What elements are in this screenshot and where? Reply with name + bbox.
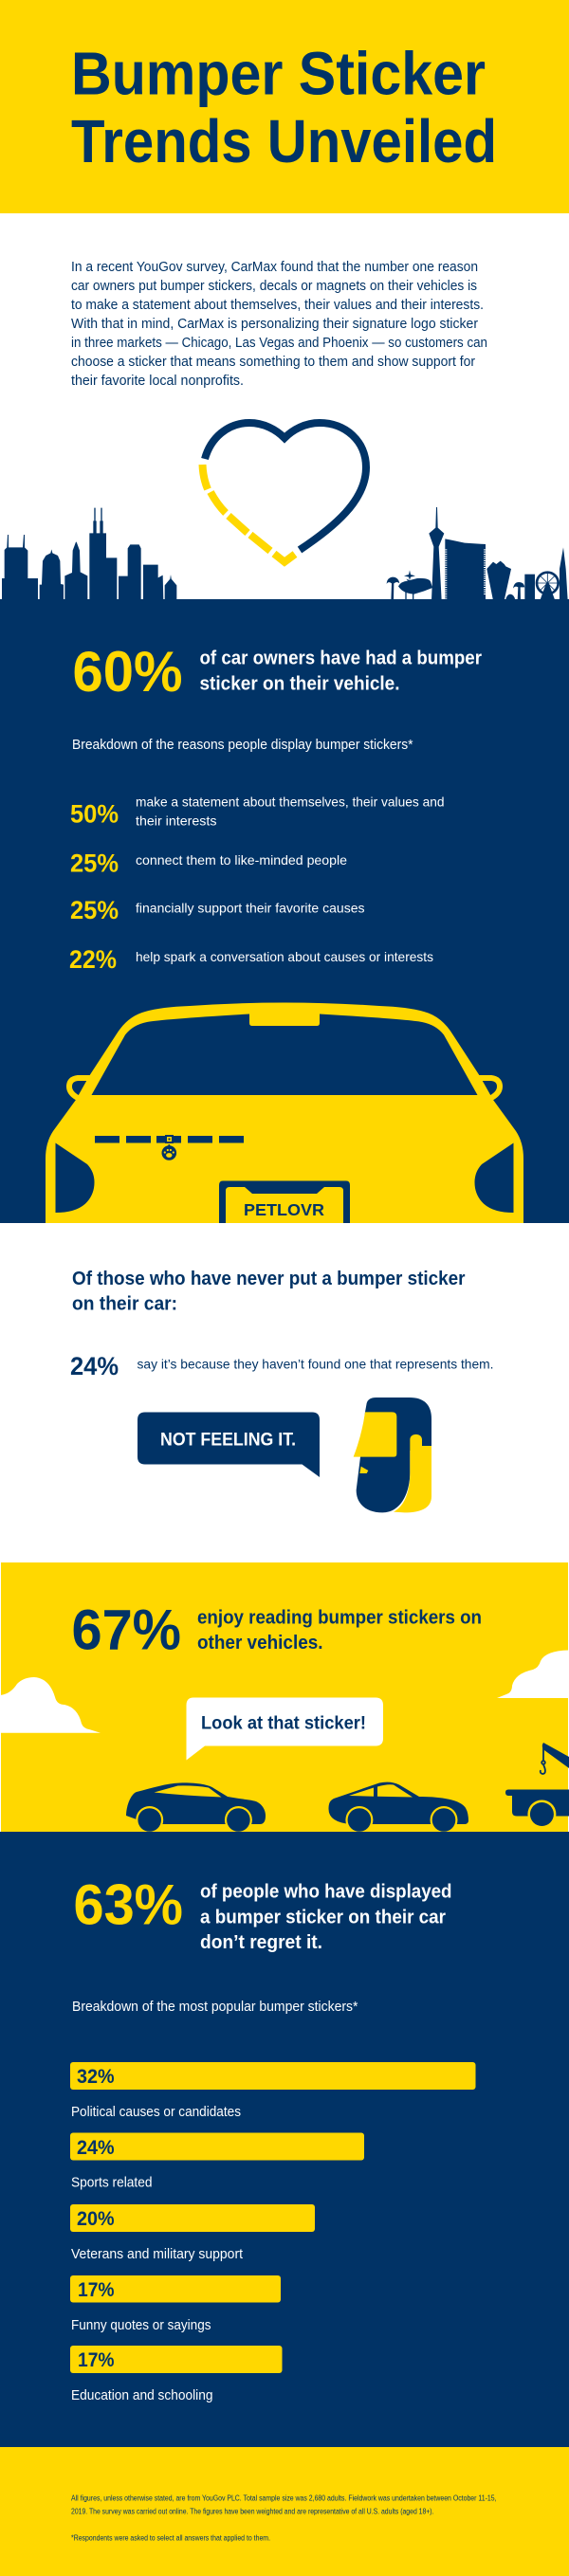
footnote text: 2019. The survey was carried out online. The figures have been weighted and are representative of all U.S. adults (aged 18+). bbox=[71, 2507, 434, 2516]
stat description: sticker on their vehicle. bbox=[199, 673, 400, 694]
skyline: Las Vegas bbox=[387, 507, 568, 600]
reason list: financially support their favorite causes bbox=[136, 901, 364, 916]
bar chart: 17% bbox=[78, 2279, 115, 2301]
bar chart: 17% bbox=[78, 2349, 115, 2371]
stat: 63%: 63% bbox=[74, 1873, 183, 1936]
stat description: of people who have displayed bbox=[200, 1881, 451, 1902]
icon: curved hotel bbox=[445, 539, 486, 600]
bar chart: 24% bbox=[77, 2137, 115, 2159]
icon: tow truck bbox=[505, 1743, 569, 1828]
stat description: don’t regret it. bbox=[200, 1931, 322, 1953]
stat description: of car owners have had a bumper bbox=[199, 647, 482, 669]
icon: car middle bbox=[328, 1782, 468, 1834]
icon: heart bbox=[203, 423, 366, 562]
panel: 67 percent section bbox=[0, 1562, 569, 1834]
footnote text: *Respondents were asked to select all answers that applied to them. bbox=[71, 2533, 270, 2543]
stat description: other vehicles. bbox=[197, 1632, 322, 1653]
stat description bbox=[199, 647, 482, 694]
bumper sticker dashes bbox=[95, 1136, 244, 1143]
speech bubble: Look at that sticker! bbox=[201, 1712, 366, 1733]
reason list bbox=[69, 795, 444, 974]
intro text block: In a recent YouGov survey, CarMax found that the number one reason bbox=[71, 260, 478, 275]
title: Bumper Sticker bbox=[71, 40, 486, 108]
heading: Of those who have never put a bumper sticker bbox=[72, 1269, 466, 1289]
panel: 60 percent section bbox=[0, 599, 569, 1223]
icon: paw tag bbox=[161, 1135, 176, 1160]
panel: 63 percent section bbox=[0, 1832, 569, 2447]
intro text block: to make a statement about themselves, their values and their interests. bbox=[71, 298, 484, 313]
icon: ferris wheel bbox=[537, 573, 559, 600]
intro text block: in three markets — Chicago, Las Vegas and Phoenix — so customers can bbox=[71, 336, 487, 351]
stat: 60%: 60% bbox=[72, 640, 182, 703]
bar chart: 32% bbox=[77, 2066, 115, 2088]
reason list: 25% bbox=[70, 850, 119, 878]
license plate bbox=[219, 1181, 350, 1223]
reason list: 25% bbox=[70, 896, 119, 924]
title bbox=[71, 40, 497, 175]
breakdown heading: Breakdown of the most popular bumper stickers* bbox=[72, 2000, 358, 2015]
bar chart: Sports related bbox=[71, 2175, 152, 2190]
panel: title banner bbox=[0, 0, 569, 213]
stat description bbox=[200, 1881, 451, 1953]
bar chart: Political causes or candidates bbox=[71, 2105, 241, 2120]
speech bubble bbox=[138, 1413, 320, 1477]
icon: Las Vegas sign bbox=[398, 570, 432, 600]
footnote text bbox=[71, 2494, 497, 2543]
heading: on their car: bbox=[72, 1293, 177, 1314]
reason list: their interests bbox=[136, 813, 216, 829]
intro text block bbox=[71, 260, 487, 389]
bar chart: 20% bbox=[77, 2208, 115, 2230]
bar chart bbox=[70, 2062, 476, 2403]
reason list: help spark a conversation about causes or interests bbox=[136, 949, 433, 964]
headlights bbox=[55, 1143, 514, 1213]
intro text block: choose a sticker that means something to them and show support for bbox=[71, 355, 475, 370]
intro text block: their favorite local nonprofits. bbox=[71, 374, 244, 389]
bar chart: Education and schooling bbox=[71, 2388, 212, 2403]
bar chart: Funny quotes or sayings bbox=[71, 2318, 211, 2333]
mirrors bbox=[69, 1078, 500, 1098]
stat description: a bumper sticker on their car bbox=[200, 1906, 446, 1928]
speech bubble: NOT FEELING IT. bbox=[160, 1430, 296, 1451]
reason list: 22% bbox=[69, 945, 117, 974]
icon: yellow car front bbox=[46, 1003, 523, 1223]
panel: never used a sticker bbox=[70, 1269, 493, 1512]
panel: footer bbox=[0, 2447, 569, 2576]
icon: car left bbox=[126, 1782, 266, 1834]
bar chart: Veterans and military support bbox=[71, 2247, 243, 2262]
stat: 67%: 67% bbox=[72, 1599, 181, 1661]
intro text block: With that in mind, CarMax is personalizing their signature logo sticker bbox=[71, 317, 478, 332]
icon: cloud right bbox=[497, 1650, 569, 1698]
stat description: enjoy reading bumper stickers on bbox=[197, 1606, 482, 1629]
intro text block: car owners put bumper stickers, decals or magnets on their vehicles is bbox=[71, 279, 477, 294]
license plate: PETLOVR bbox=[244, 1200, 324, 1219]
stat description bbox=[197, 1606, 482, 1653]
icon: Stratosphere tower bbox=[429, 507, 444, 600]
speech bubble bbox=[186, 1697, 383, 1760]
stat: 24%: 24% bbox=[70, 1352, 119, 1380]
reason list: 50% bbox=[70, 800, 119, 829]
icon: cloud left bbox=[0, 1677, 101, 1733]
footnote text: All figures, unless otherwise stated, are from YouGov PLC. Total sample size was 2,680 adults. Fieldwork was undertaken between October 11-15, bbox=[71, 2494, 497, 2503]
title: Trends Unveiled bbox=[71, 107, 497, 175]
reason list: make a statement about themselves, their values and bbox=[136, 795, 444, 810]
breakdown heading: Breakdown of the reasons people display bumper stickers* bbox=[72, 738, 413, 753]
icon: palm tree bbox=[387, 577, 399, 600]
reason list: connect them to like-minded people bbox=[136, 852, 347, 868]
icon: face with hand bbox=[354, 1398, 431, 1512]
windshield bbox=[91, 1014, 478, 1095]
skyline: Chicago bbox=[2, 508, 176, 600]
stat description: say it’s because they haven’t found one that represents them. bbox=[137, 1358, 493, 1371]
heading bbox=[72, 1269, 466, 1314]
